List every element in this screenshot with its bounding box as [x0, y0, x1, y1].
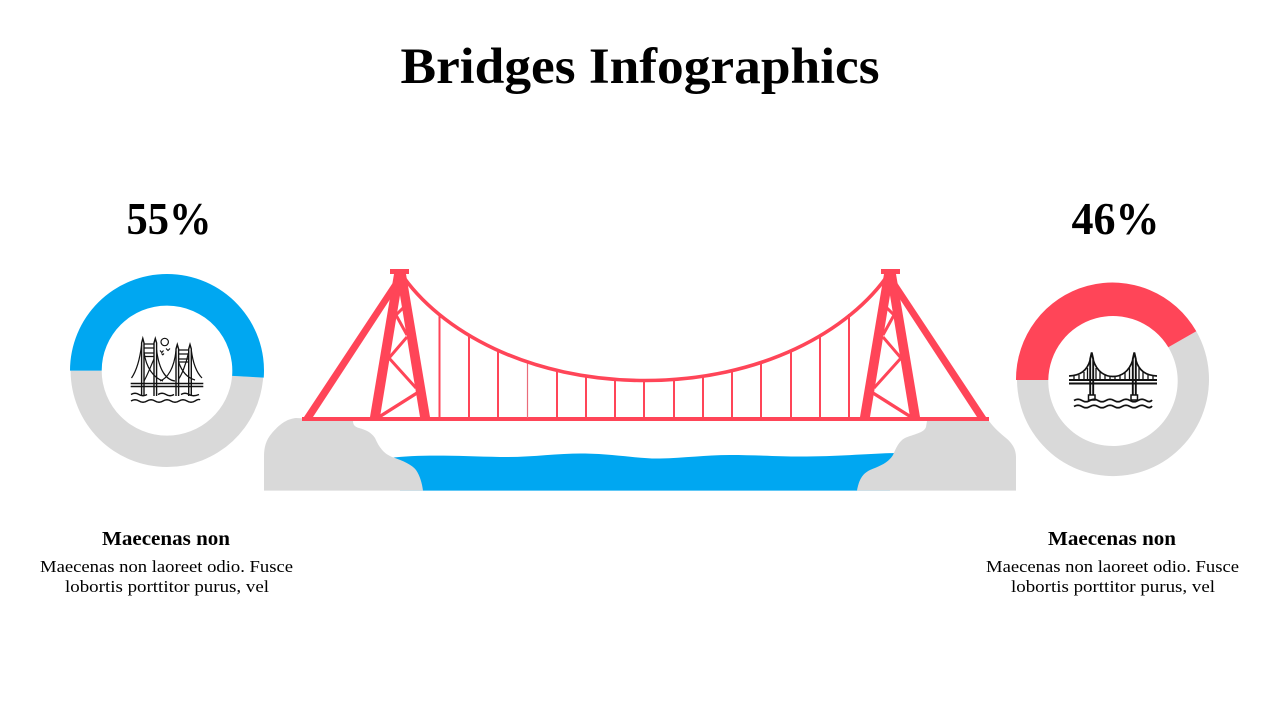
right body text [986, 557, 1239, 596]
right body text: lobortis porttitor purus, vel [1011, 577, 1215, 596]
water [390, 453, 895, 491]
panel: left statistic [40, 193, 293, 596]
panel: bridge illustration [264, 269, 1016, 491]
right donut chart [1016, 283, 1209, 476]
left land [264, 418, 423, 491]
main cable [400, 272, 890, 380]
panel: right statistic [986, 193, 1239, 596]
icon: twin suspension bridges with sun and birds [131, 338, 203, 402]
right percentage: 46% [1072, 193, 1160, 244]
left body text: lobortis porttitor purus, vel [65, 577, 269, 596]
right tower [860, 269, 988, 420]
bridge deck [302, 417, 989, 421]
title: Bridges Infographics [400, 39, 880, 95]
suspender cables [440, 314, 849, 418]
right heading: Maecenas non [1048, 529, 1176, 550]
left tower [302, 269, 430, 420]
icon: suspension bridge over water [1069, 352, 1157, 408]
left body text [40, 557, 293, 596]
right land [857, 421, 1016, 491]
left percentage: 55% [126, 193, 212, 244]
left donut chart [70, 274, 264, 467]
left body text: Maecenas non laoreet odio. Fusce [40, 557, 293, 576]
left heading: Maecenas non [102, 529, 230, 550]
right body text: Maecenas non laoreet odio. Fusce [986, 557, 1239, 576]
